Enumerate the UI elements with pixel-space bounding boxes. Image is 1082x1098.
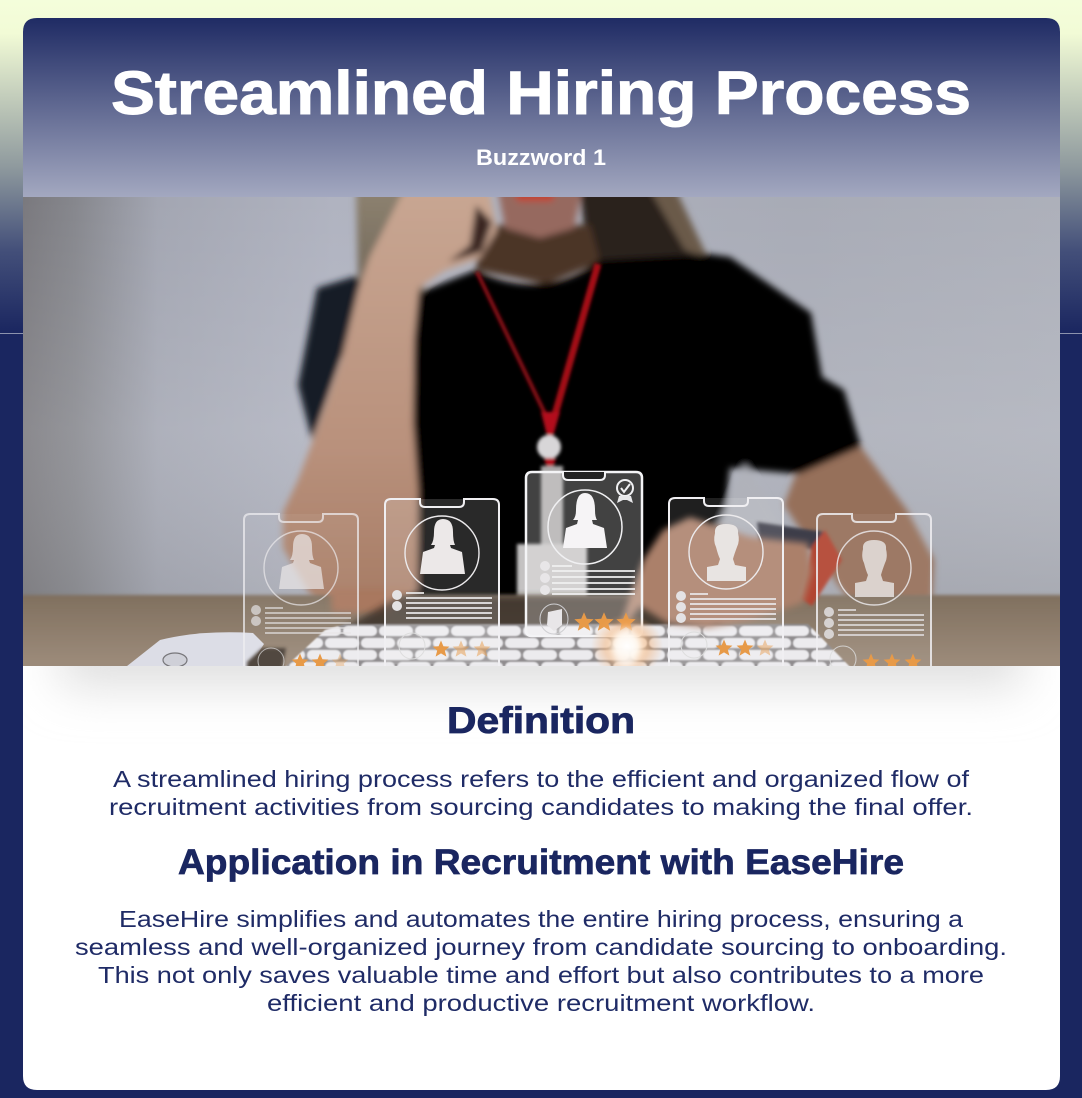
white mouse xyxy=(127,632,288,666)
raised left arm xyxy=(283,190,497,614)
award seal xyxy=(617,480,633,503)
subtitle: Buzzword 1 xyxy=(476,145,606,170)
white text panel xyxy=(23,620,1060,1090)
right arm xyxy=(784,447,934,602)
profile card 5 xyxy=(816,513,932,666)
application text: efficient and productive recruitment workflow. xyxy=(267,990,815,1016)
heading: application in recruitment: Application in Recruitment with EaseHire xyxy=(178,843,904,882)
table shadow under arm xyxy=(340,596,720,630)
application text: seamless and well-organized journey from candidate sourcing to onboarding. xyxy=(75,934,1007,960)
photo: recruiter selecting candidate profiles xyxy=(23,197,1060,666)
wall gap between torso and arm xyxy=(711,458,760,529)
office wall xyxy=(23,197,1060,617)
application text: EaseHire simplifies and automates the entire hiring process, ensuring a xyxy=(119,906,963,932)
watch xyxy=(757,522,842,606)
neck and chin xyxy=(476,190,600,284)
definition text: A streamlined hiring process refers to the efficient and organized flow of xyxy=(113,766,970,792)
application text xyxy=(75,906,1007,1016)
profile card 1 xyxy=(243,513,359,666)
left sleeve xyxy=(298,276,370,440)
touch glow xyxy=(593,617,661,666)
red lanyard and badge xyxy=(477,264,598,604)
hair xyxy=(352,197,711,300)
star ratings xyxy=(292,612,921,670)
profile card 3, highlighted xyxy=(526,472,642,636)
profile card 2 xyxy=(384,498,500,664)
wooden table xyxy=(23,592,1060,666)
definition text xyxy=(109,766,973,820)
person, out of focus xyxy=(283,190,934,614)
profile card 4 xyxy=(668,497,784,664)
hand pressing keyboard xyxy=(618,517,812,636)
title: Streamlined Hiring Process xyxy=(111,59,971,127)
forearm end on table xyxy=(328,594,404,615)
heading: definition: Definition xyxy=(447,700,635,741)
page background gradient xyxy=(0,0,1082,333)
header band xyxy=(23,18,1060,197)
fingers shadow xyxy=(448,205,492,262)
black shirt xyxy=(400,254,861,600)
keyboard xyxy=(286,623,850,666)
application text: This not only saves valuable time and effort but also contributes to a more xyxy=(98,962,984,988)
definition text: recruitment activities from sourcing candidates to making the final offer. xyxy=(109,794,973,820)
